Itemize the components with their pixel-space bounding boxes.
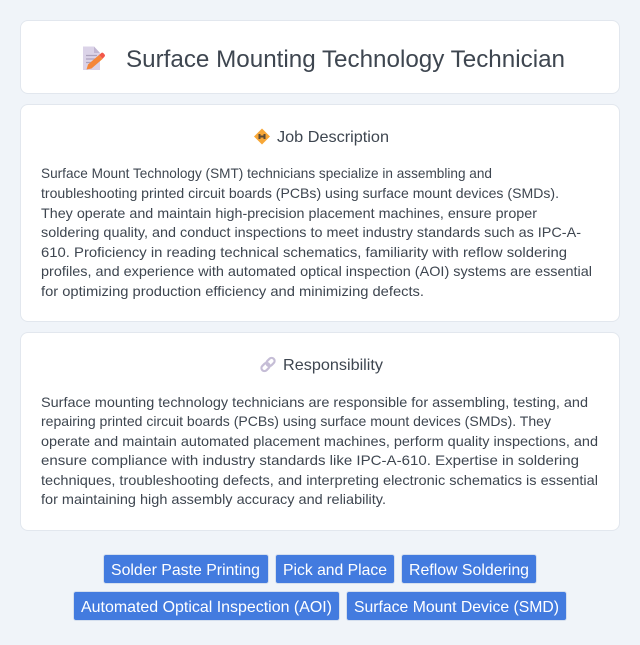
- text block: responsibility: techniques, troubleshooting defects, and interpreting electronic schematics is essential: [41, 472, 598, 488]
- panel: title card: [20, 20, 620, 94]
- panel: job description card: [20, 104, 620, 322]
- text block: job description: They operate and maintain high-precision placement machines, ensure proper: [41, 205, 537, 221]
- text block: job description: for optimizing production efficiency and minimizing defects.: [41, 283, 424, 299]
- heading: job description: Job Description: [277, 129, 389, 146]
- text block: responsibility: [41, 394, 598, 507]
- text block: responsibility: ensure compliance with industry standards like IPC-A-610. Expertise in soldering: [41, 452, 579, 468]
- icon: chain link: [260, 357, 276, 372]
- title: Surface Mounting Technology Technician: [126, 46, 565, 73]
- tag labels: [81, 562, 559, 616]
- text block: responsibility: Surface mounting technology technicians are responsible for assembling, testing, and: [41, 394, 588, 410]
- tag: reflow soldering: [401, 554, 537, 584]
- text block: job description: Surface Mount Technology (SMT) technicians specialize in assembling and: [41, 165, 492, 181]
- text block: job description: [41, 165, 592, 299]
- text block: job description: 610. Proficiency in reading technical schematics, familiarity with reflow soldering: [41, 244, 567, 260]
- icon: orange diamond: [254, 128, 270, 144]
- tag labels: Automated Optical Inspection (AOI): [81, 599, 332, 616]
- text block: responsibility: repairing printed circuit boards (PCBs) using surface mount devices (SMDs). They: [41, 413, 551, 429]
- text block: job description: troubleshooting printed circuit boards (PCBs) using surface mount devices (SMDs).: [41, 185, 559, 201]
- tag labels: Pick and Place: [283, 562, 387, 579]
- tag: automated optical inspection: [73, 591, 340, 621]
- tag labels: Reflow Soldering: [409, 562, 529, 579]
- tag labels: Surface Mount Device (SMD): [354, 599, 559, 616]
- text block: job description: profiles, and experience with automated optical inspection (AOI) systems are essential: [41, 263, 592, 279]
- heading: responsibility: Responsibility: [283, 357, 383, 374]
- tag: pick and place: [275, 554, 395, 584]
- text block: job description: soldering quality, and conduct inspections to meet industry standards such as IPC-A-: [41, 224, 581, 240]
- tag labels: Solder Paste Printing: [111, 562, 260, 579]
- text block: responsibility: for maintaining high assembly accuracy and reliability.: [41, 491, 386, 507]
- panel: responsibility card: [20, 332, 620, 531]
- icon: document with pencil: [83, 46, 105, 70]
- tag: solder paste printing: [103, 554, 269, 584]
- tag: surface mount device: [346, 591, 567, 621]
- text block: responsibility: operate and maintain automated placement machines, perform quality inspections, and: [41, 433, 598, 449]
